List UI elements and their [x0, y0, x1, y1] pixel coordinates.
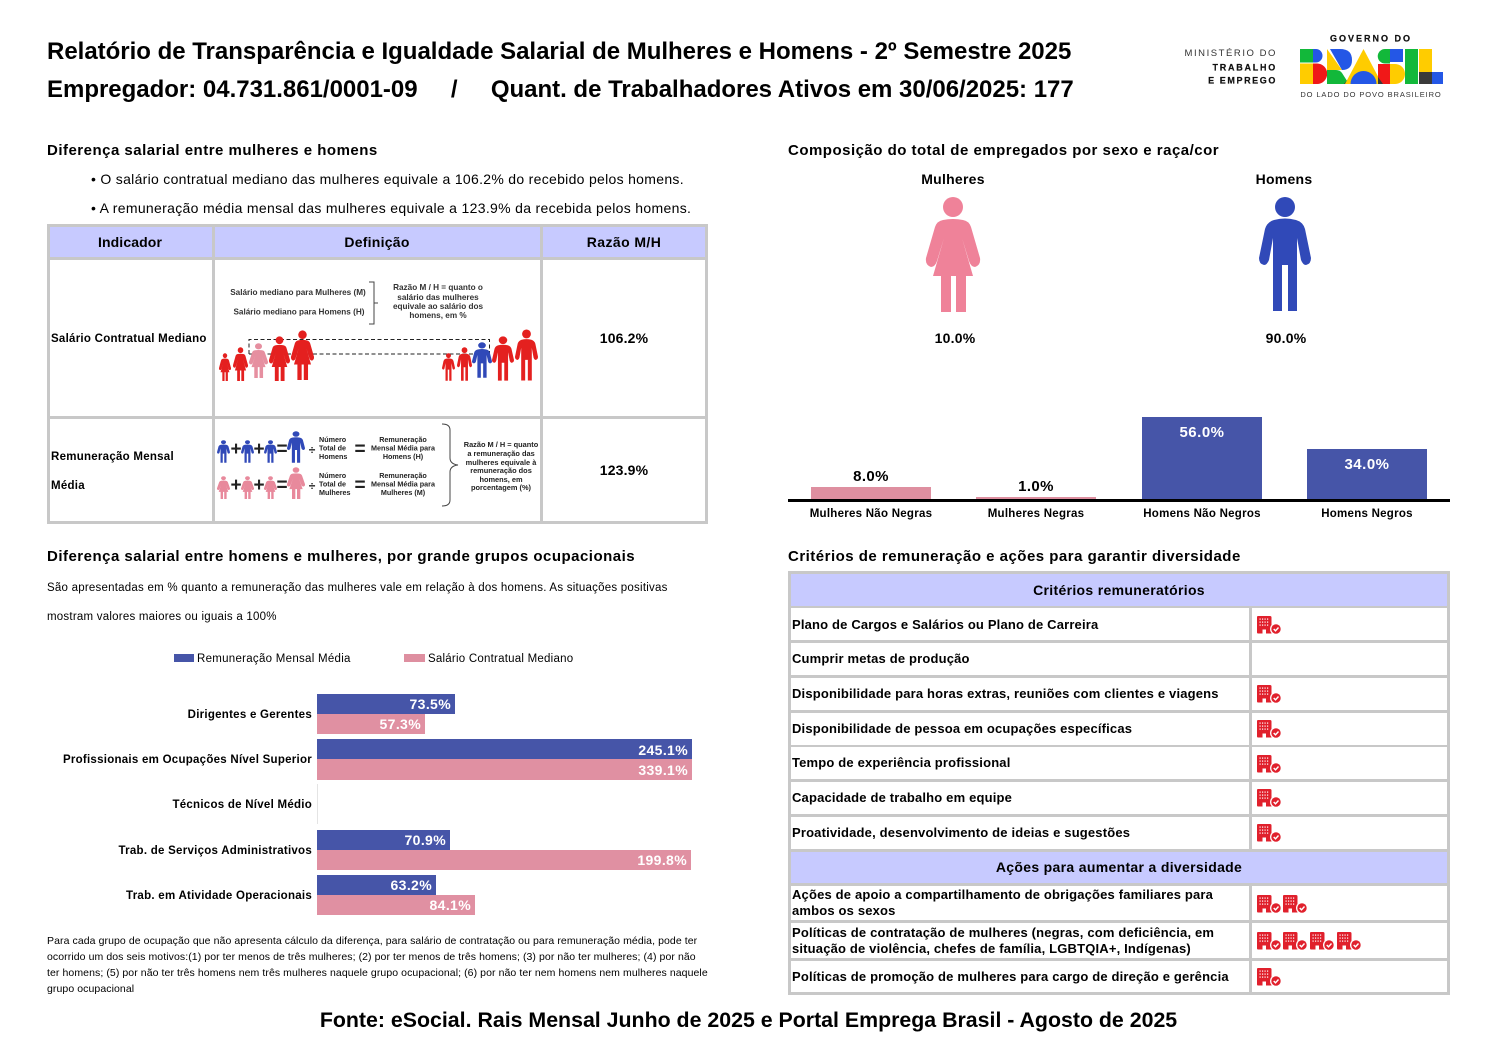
legend — [174, 653, 573, 665]
logo: ministry and government: DO LADO DO POVO BRASILEIRO — [1300, 90, 1442, 99]
diagram: median salary definition: salário das mulheres — [397, 293, 479, 302]
bar: Homens Não Negros — [1142, 417, 1262, 500]
value: women share: 10.0% — [935, 330, 975, 346]
table: criteria and actions: Proatividade, desenvolvimento de ideias e sugestões — [792, 825, 1130, 840]
diagram: average pay definition: Mensal Média para — [371, 444, 436, 452]
value: average pay: 123.9% — [600, 462, 648, 478]
category labels — [810, 508, 1413, 520]
bar: Mulheres Negras — [976, 497, 1096, 500]
category labels: Homens Não Negros — [1143, 508, 1261, 520]
footnote: ter homens; (5) por não ter três homens nem três mulheres naquele grupo ocupacional; (6) por não ter nem homens nem mulheres naquele — [47, 967, 708, 979]
diagram: average pay definition: Remuneração — [379, 471, 427, 480]
diagram: average pay definition: = — [354, 439, 366, 460]
icon: man — [1259, 197, 1311, 311]
diagram: average pay definition: Homens (H) — [383, 452, 424, 461]
legend: Salário Contratual Mediano — [428, 653, 573, 665]
footnote: grupo ocupacional — [47, 983, 134, 995]
diagram: average pay definition: ÷ — [309, 479, 316, 493]
legend: Remuneração Mensal Média — [197, 653, 351, 665]
table: criteria and actions: Capacidade de trabalho em equipe — [792, 790, 1012, 805]
icons: company check marks — [1257, 616, 1361, 986]
diagram: average pay definition: + — [253, 475, 265, 496]
footnote: ocorrido um dos seis motivos:(1) por ter menos de três mulheres; (2) por ter menos de três homens; (3) por não ter mulheres; (4) por não — [47, 951, 696, 963]
heading: composition: Composição do total de empregados por sexo e raça/cor — [788, 142, 1219, 159]
table: indicators — [47, 224, 708, 524]
group: Profissionais: Profissionais em Ocupações Nível Superior — [63, 754, 312, 766]
axis — [788, 499, 1450, 502]
value: 8.0% — [853, 468, 889, 485]
text: contractual salary: • O salário contratual mediano das mulheres equivale a 106.2% do recebido pelos homens. — [91, 171, 684, 187]
heading: salary gap: Diferença salarial entre mulheres e homens — [47, 142, 378, 159]
source footer: Fonte: eSocial. Rais Mensal Junho de 2025 e Portal Emprega Brasil - Agosto de 2025 — [320, 1008, 1177, 1032]
diagram: average pay definition: mulheres equivale à — [466, 458, 537, 467]
employer subtitle: Empregador: 04.731.861/0001-09 / Quant. de Trabalhadores Ativos em 30/06/2025: 177 — [47, 76, 1074, 103]
table: indicators: Média — [51, 480, 85, 492]
text: explanation — [47, 582, 668, 623]
table: criteria and actions: Disponibilidade para horas extras, reuniões com clientes e viagens — [792, 686, 1219, 701]
header: Definição: Definição — [344, 234, 410, 250]
diagram: average pay definition: = — [276, 439, 288, 460]
diagram: average pay definition: a remuneração das — [467, 449, 535, 458]
diagram: average pay definition: + — [230, 475, 242, 496]
diagram: average pay definition: Homens — [319, 452, 347, 461]
header: Razão: Razão M/H — [587, 234, 661, 250]
diagram: median salary definition: Salário mediano para Mulheres (M) — [230, 288, 366, 297]
value: 34.0% — [1344, 456, 1390, 473]
logo: ministry and government: TRABALHO — [1212, 62, 1277, 72]
diagram: average pay definition: Número — [319, 435, 347, 444]
diagram: average pay definition: remuneração dos — [470, 466, 532, 475]
value: median salary: 106.2% — [600, 330, 648, 346]
category labels: Mulheres Negras — [988, 508, 1084, 520]
logo: ministry and government: GOVERNO DO — [1330, 34, 1412, 44]
bar: Homens Negros — [1307, 449, 1427, 500]
value: 1.0% — [1018, 478, 1054, 495]
bar chart: occupational groups: 84.1% — [430, 897, 471, 913]
bar chart: occupational groups: 245.1% — [638, 742, 688, 758]
criteria rows: Plano de Cargos e Salários ou Plano de Carreira — [792, 617, 1098, 632]
group: Serviços Administrativos: Trab. de Serviços Administrativos — [118, 845, 312, 857]
category labels: Mulheres Não Negras — [810, 508, 932, 520]
table: criteria and actions: Tempo de experiência profissional — [792, 755, 1010, 770]
logo: ministry and government: MINISTÉRIO DO — [1185, 48, 1277, 59]
panel: salary gap — [47, 142, 691, 216]
action rows: Ações de apoio a compartilhamento de obrigações familiares para — [792, 887, 1213, 902]
header: Indicador: Indicador — [98, 234, 162, 250]
table: criteria and actions: Políticas de promoção de mulheres para cargo de direção e gerência — [792, 969, 1229, 984]
diagram: median salary definition: Razão M / H = quanto o — [393, 283, 483, 292]
bar chart: occupational groups: 73.5% — [410, 696, 451, 712]
diagram: average pay definition: = — [354, 475, 366, 496]
diagram: average pay definition: = — [276, 475, 288, 496]
text: explanation: São apresentadas em % quanto a remuneração das mulheres vale em relação à dos homens. As situações positivas — [47, 582, 668, 594]
table: criteria and actions: Cumprir metas de produção — [792, 651, 970, 666]
table: criteria and actions: Disponibilidade de pessoa em ocupações específicas — [792, 721, 1132, 736]
bar chart: occupational groups: 57.3% — [380, 716, 421, 732]
diagram: average pay definition: Mulheres (M) — [381, 488, 426, 497]
diagram: average pay definition: + — [230, 439, 242, 460]
footnote: Para cada grupo de ocupação que não apresenta cálculo da diferença, para salário de contratação ou para remuneração média, pode ter — [47, 935, 697, 947]
table: criteria and actions: ambos os sexos — [792, 903, 896, 918]
diagram: median salary definition: homens, em % — [409, 311, 467, 320]
bar chart: occupational groups: 63.2% — [391, 877, 432, 893]
category labels: Homens Negros — [1321, 508, 1413, 520]
footnote — [47, 935, 708, 995]
diagram: average pay definition: Razão M / H = quanto — [464, 440, 539, 449]
diagram: average pay definition: porcentagem (%) — [471, 483, 532, 492]
logo: ministry and government — [1185, 34, 1443, 99]
diagram: median salary definition: equivale ao salário dos — [393, 302, 483, 311]
bar chart: occupational groups: 70.9% — [405, 832, 446, 848]
group: Operacionais: Trab. em Atividade Operacionais — [126, 890, 312, 902]
table: criteria and actions: situação de violência, chefes de família, LGBTQIA+, Indígenas) — [792, 941, 1191, 956]
label: Mulheres: Mulheres — [921, 171, 985, 187]
heading: criteria: Critérios de remuneração e ações para garantir diversidade — [788, 548, 1241, 565]
table: criteria and actions: Políticas de contratação de mulheres (negras, com deficiência, em — [792, 925, 1214, 940]
diagram: average pay definition — [217, 424, 539, 506]
diagram: median salary definition: Salário mediano para Homens (H) — [233, 308, 365, 316]
text: average pay: • A remuneração média mensal das mulheres equivale a 123.9% da recebida pelos homens. — [91, 200, 691, 216]
heading: occupational gap: Diferença salarial entre homens e mulheres, por grande grupos ocupacionais — [47, 548, 635, 565]
bar chart: occupational groups — [63, 694, 692, 915]
diagram: average pay definition: Remuneração — [379, 435, 427, 444]
diagram: average pay definition: ÷ — [309, 443, 316, 457]
icon: woman — [926, 197, 980, 312]
header: criteria: Critérios remuneratórios — [1033, 582, 1205, 598]
row label: median salary: Salário Contratual Mediano — [51, 333, 207, 345]
diagram: average pay definition: homens, em — [479, 475, 523, 484]
header: actions: Ações para aumentar a diversidade — [996, 859, 1242, 875]
diagram: average pay definition: Mensal Média para — [371, 480, 436, 488]
bar chart: occupational groups: 339.1% — [638, 762, 688, 778]
diagram: average pay definition: Número — [319, 471, 347, 480]
diagram: average pay definition: Total de — [319, 444, 346, 452]
value: men share: 90.0% — [1266, 330, 1306, 346]
value: 56.0% — [1179, 424, 1225, 441]
row label: average pay: Remuneração Mensal — [51, 451, 174, 463]
diagram: median salary definition — [219, 282, 538, 381]
group: Dirigentes: Dirigentes e Gerentes — [188, 709, 312, 721]
bar: Mulheres Não Negras — [811, 487, 931, 500]
bar chart: composition by race — [788, 417, 1450, 520]
diagram: average pay definition: Mulheres — [319, 488, 351, 497]
text: explanation: mostram valores maiores ou iguais a 100% — [47, 611, 277, 623]
diagram: average pay definition: + — [253, 439, 265, 460]
diagram: average pay definition: Total de — [319, 480, 346, 488]
bar chart: occupational groups: 199.8% — [637, 852, 687, 868]
table: criteria and actions — [788, 571, 1450, 995]
group: Técnicos: Técnicos de Nível Médio — [172, 799, 312, 811]
title: Relatório de Transparência e Igualdade Salarial de Mulheres e Homens - 2º Semestre 2025 — [47, 38, 1071, 65]
logo: ministry and government: E EMPREGO — [1208, 76, 1277, 86]
label: Homens: Homens — [1256, 171, 1312, 187]
